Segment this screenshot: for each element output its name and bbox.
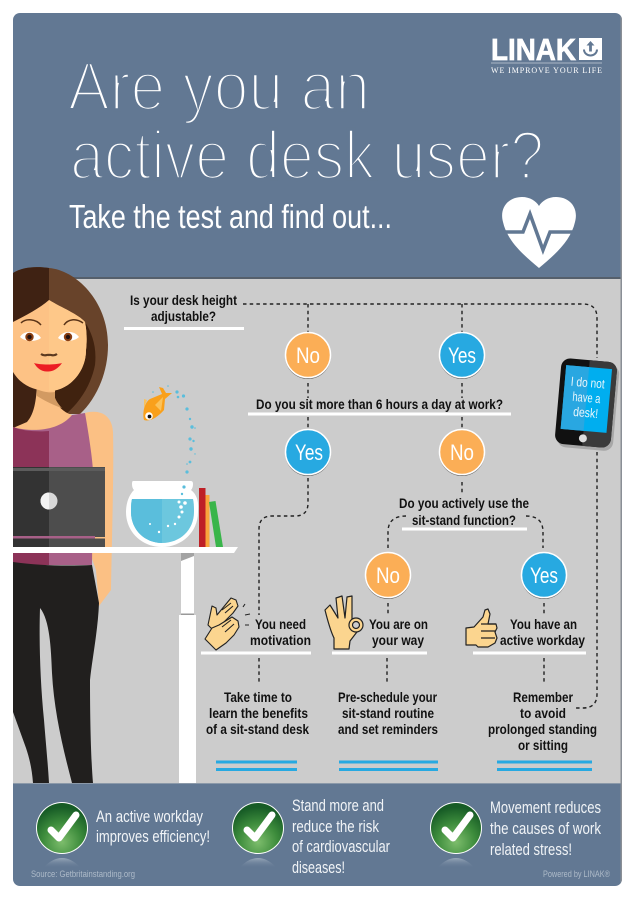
result: on your way: your way	[372, 632, 424, 648]
logo: LINAK: LINAK	[491, 32, 577, 67]
question: sit-stand function	[399, 495, 529, 530]
illustration: fish bowl	[126, 481, 198, 547]
question: sit-stand function: Do you actively use the	[399, 495, 529, 511]
woman: nose	[41, 354, 57, 355]
result: active workday: active workday	[500, 632, 585, 648]
answer: yes	[439, 332, 485, 379]
footer item: efficiency	[36, 802, 210, 868]
woman: arm	[85, 412, 113, 606]
advice: reminders: and set reminders	[338, 721, 438, 737]
woman: neck	[14, 390, 72, 430]
result: motivation: You need	[255, 616, 306, 632]
icon: thumbs up	[466, 609, 497, 647]
answer: no sit-stand: No	[376, 563, 400, 588]
footer item: stress: Movement reduces	[490, 799, 601, 817]
footer item: cardiovascular: diseases!	[292, 859, 345, 877]
woman: face	[13, 300, 87, 391]
illustration: desk leg	[179, 553, 196, 783]
answer: no: No	[296, 343, 320, 368]
advice: prolonged standing: to avoid	[520, 705, 566, 721]
footer item: efficiency: An active workday	[96, 808, 204, 826]
answer: yes sit-stand: Yes	[530, 563, 558, 588]
footer item: efficiency: improves efficiency!	[96, 828, 210, 846]
check badge	[232, 802, 284, 868]
woman: top	[13, 413, 93, 565]
advice: reminders	[338, 689, 438, 771]
check badge	[430, 802, 482, 868]
footer item: cardiovascular: reduce the risk	[292, 818, 380, 836]
illustration: desk top	[13, 547, 238, 553]
logo: LINAK: WE IMPROVE YOUR LIFE	[491, 66, 602, 75]
result: active workday	[473, 616, 586, 654]
advice: reminders: sit-stand routine	[342, 705, 434, 721]
footer item: stress: related stress!	[490, 841, 572, 859]
advice: prolonged standing	[488, 689, 597, 771]
answer: yes after sitting: Yes	[295, 440, 323, 465]
footer item: stress	[430, 799, 602, 868]
result: on your way: You are on	[369, 616, 428, 632]
answer: no after sitting: No	[450, 440, 474, 465]
footer item: stress: the causes of work	[490, 820, 602, 838]
woman: lips	[34, 363, 62, 372]
advice: prolonged standing: prolonged standing	[488, 721, 597, 737]
advice: prolonged standing: Remember	[513, 689, 573, 705]
woman: hair back	[13, 267, 108, 428]
answer: yes: Yes	[448, 343, 476, 368]
title: active desk user?	[70, 117, 544, 194]
title	[68, 48, 544, 194]
title: Are you an	[68, 48, 370, 125]
illustration: goldfish	[143, 387, 172, 420]
woman: trousers	[13, 562, 99, 783]
answer: no sit-stand	[365, 552, 411, 599]
subtitle: Take the test and find out...	[69, 198, 392, 235]
advice: reminders: Pre-schedule your	[338, 689, 437, 705]
illustration: books	[199, 488, 223, 547]
answer: yes after sitting	[285, 430, 331, 476]
result: on your way	[332, 616, 428, 654]
flow lines	[243, 304, 597, 708]
footer item: cardiovascular	[232, 797, 390, 877]
footer item: cardiovascular: of cardiovascular	[292, 838, 390, 856]
result: motivation: motivation	[250, 632, 311, 648]
check badge	[36, 802, 88, 868]
icon: clapping hands	[205, 598, 250, 650]
woman: laptop	[49, 467, 105, 537]
icon: phone	[554, 358, 620, 451]
result: motivation	[201, 616, 311, 654]
advice: benefits: Take time to	[224, 689, 292, 705]
question: desk height: Is your desk height	[130, 292, 237, 308]
logo: LINAK	[491, 32, 602, 75]
footer item: cardiovascular: Stand more and	[292, 797, 384, 815]
answer: yes sit-stand	[521, 552, 567, 599]
answer: no after sitting	[439, 430, 485, 476]
answer: no	[285, 332, 331, 379]
source note: Source: Getbritainstanding.org	[31, 869, 135, 880]
question: sit-stand function: sit-stand function?	[412, 512, 516, 528]
advice: prolonged standing: or sitting	[518, 737, 568, 753]
question: desk height	[124, 292, 244, 330]
question: sit more than 6 hours: Do you sit more than 6 hours a day at work?	[256, 396, 503, 412]
advice: benefits: learn the benefits	[209, 705, 308, 721]
powered by note: Powered by LINAK®	[543, 869, 610, 880]
icon: phone: I do not	[570, 374, 606, 392]
advice: benefits	[206, 689, 309, 771]
icon: ok hand	[325, 596, 363, 649]
icon: phone: desk!	[573, 404, 599, 421]
icon: phone: have a	[572, 389, 602, 406]
woman: eyes	[20, 332, 79, 341]
icon: heart	[500, 197, 578, 268]
advice: benefits: of a sit-stand desk	[206, 721, 309, 737]
illustration: woman	[13, 267, 113, 783]
question: desk height: adjustable?	[151, 308, 216, 324]
illustration: water droplets	[152, 385, 196, 474]
result: active workday: You have an	[510, 616, 577, 632]
